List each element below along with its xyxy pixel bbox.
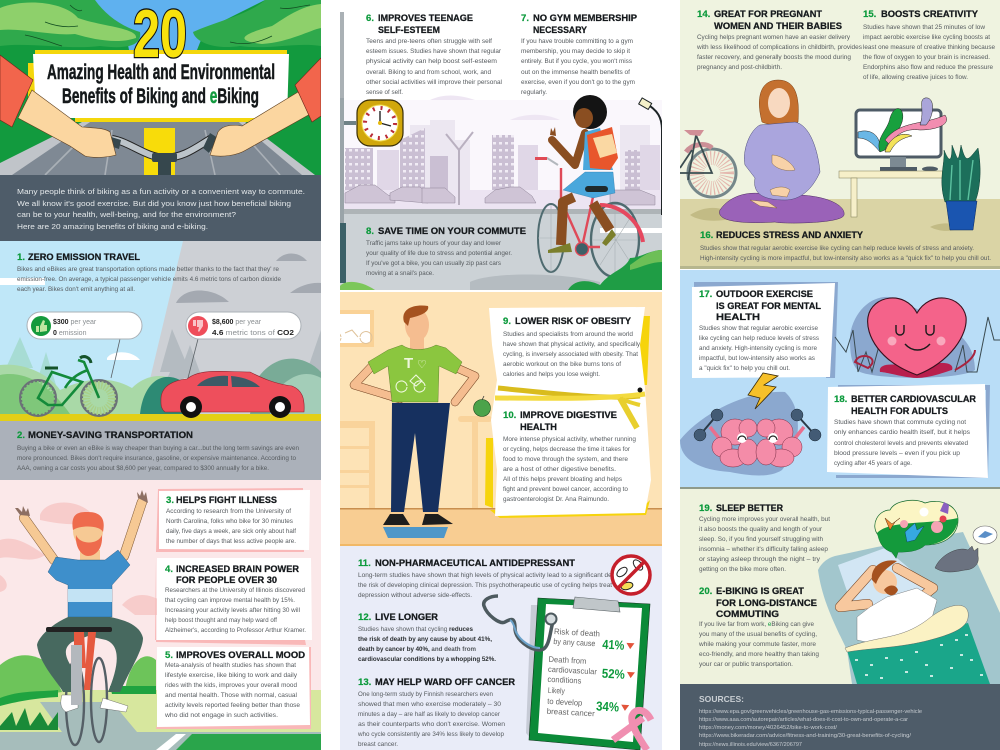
text: self-esteem: esteem issues. Studies have shown that regular — [366, 49, 501, 55]
card: helps fight illness: HELPS FIGHT ILLNESS — [176, 495, 278, 506]
icon: thumbs up — [31, 316, 51, 336]
text: commute: Traffic jams take up hours of your day and lower — [366, 241, 501, 247]
stat: cardiovascular: conditions — [547, 675, 582, 686]
poles — [340, 12, 662, 283]
icon: lightning bolt — [748, 373, 778, 409]
text: commute: moving at a snail's pace. — [366, 271, 434, 277]
icon: parked bicycle — [680, 130, 736, 197]
figure: man with loose trousers — [354, 306, 475, 538]
card: outdoor exercise: HEALTH — [716, 312, 760, 323]
text: creativity: of life, allowing creative juices to flow. — [863, 75, 968, 81]
panel: sleep and e-biking — [680, 489, 1000, 684]
heading 10: IMPROVE DIGESTIVE — [520, 410, 618, 421]
icon: smiling heart — [855, 298, 975, 378]
heading 10: HEALTH — [520, 422, 557, 433]
heading 14: WOMEN AND THEIR BABIES — [714, 21, 843, 32]
bed — [818, 532, 1000, 684]
card: outdoor exercise: and anxiety. High-intensity cycling is more — [699, 346, 818, 352]
icon: red car — [161, 371, 304, 418]
text: cancer: showed that men who exercise moderately – 30 — [358, 702, 502, 708]
text: antidepressant: Long-term studies have shown that high levels of physical activity lead to a significant decrease in — [358, 573, 638, 579]
text: stress: Studies show that regular aerobic exercise like cycling can help reduce levels of stress and anxiety. — [700, 246, 974, 252]
text: stress: High-intensity cycling is more impactful, but low-intensity also works as a "quick fix" to help you chill out. — [700, 256, 991, 262]
callout: car cost: 4.6 metric tons of CO2 — [212, 330, 294, 337]
card: outdoor exercise: IS GREAT FOR MENTAL — [716, 301, 821, 312]
card: improves overall mood: rides with the kids, improves your overall mood — [165, 683, 297, 689]
text: no gym: If you have trouble committing to a gym — [521, 39, 633, 45]
stat: breast cancer — [547, 686, 630, 720]
icon: pink ribbon — [613, 710, 651, 750]
icon: ecg line — [835, 317, 1000, 372]
blanket — [845, 605, 990, 684]
text: live longer: the risk of death by any cause by about 41%, — [358, 637, 492, 643]
text: no gym: membership, you may decide to skip it — [521, 49, 630, 55]
figure: man with loose trousers: T — [404, 355, 413, 372]
heading 7: NECESSARY — [533, 25, 588, 36]
figure: woman on bicycle — [535, 95, 643, 277]
callout: car cost — [186, 312, 301, 378]
text: commute — [366, 241, 512, 277]
heading 13: 13. — [358, 677, 371, 688]
card: outdoor exercise: 17. — [699, 289, 712, 300]
heading 9: LOWER RISK OF OBESITY — [515, 316, 632, 327]
text: digestion: More intense physical activity, whether running — [503, 437, 636, 443]
text: cancer: minutes a day – are half as likely to develop cancer — [358, 712, 500, 718]
text: zero emission: emission-free. On average, a typical passenger vehicle emits 4.6 metric tons of carbon dioxide — [17, 277, 282, 283]
text: sleep: insomnia – whether it's difficulty falling asleep — [699, 547, 829, 553]
text: no gym: entirely. But if you cycle, you won't miss — [521, 59, 632, 65]
callout: bike cost: $300 per year — [53, 319, 97, 326]
text: sleep: it also boosts the quality and length of your — [699, 527, 822, 533]
card: obesity and digestion — [485, 307, 651, 518]
text: stress — [700, 246, 991, 262]
text: creativity: Endorphins also flow and reduce the pressure — [863, 65, 994, 71]
card: increased brain power: Researchers at the University of Illinois discovered — [165, 588, 305, 594]
card: increased brain power — [155, 558, 312, 645]
text: self-esteem: overall. Biking to and from school, work, and — [366, 70, 491, 76]
heading 8: SAVE TIME ON YOUR COMMUTE — [378, 226, 527, 237]
ground — [0, 655, 321, 750]
text: long distance: your car or public transportation. — [699, 662, 793, 668]
clipboard chart — [526, 597, 650, 750]
cars in traffic — [345, 185, 655, 205]
panel: money-saving transportation: Buying a bike or even an eBike is way cheaper than buying a car...but the long term savings are even — [17, 446, 299, 452]
heading 20: FOR LONG-DISTANCE — [716, 598, 818, 609]
text: long distance: you many of the usual benefits of cycling, — [699, 632, 817, 638]
text: pregnant: faster recovery, and generally boosts the mood during — [697, 55, 851, 61]
text: digestion: gastroenterologist Dr. Ana Raimundo. — [503, 497, 609, 503]
text: self-esteem: other social activities will improve their personal — [366, 80, 502, 86]
card: helps fight illness: North Carolina, folks who bike for 30 minutes — [166, 519, 293, 525]
text: creativity: the flow of oxygen to your brain is increased. — [863, 55, 990, 61]
card: better cardiovascular health: blood pressure levels – even if you pick up — [834, 451, 961, 457]
card: improves overall mood: lifestyle exercise, like biking to work and daily — [165, 673, 297, 679]
panel: sources — [680, 684, 1000, 750]
heading 16: 16. — [700, 230, 713, 241]
text: pregnant: with less likelihood of complications in childbirth, provides — [696, 45, 862, 51]
panel: sources: https://www.bikeradar.com/advice/fitness-and-training/30-great-benefits-of-cycling/ — [699, 733, 912, 739]
stat: risk of death: Risk of death — [554, 627, 600, 638]
stat: risk of death — [553, 627, 635, 653]
heading 12: LIVE LONGER — [375, 612, 438, 623]
heading 6: 6. — [366, 13, 374, 24]
figure: cyclist with raised arms — [15, 490, 148, 745]
card: improves overall mood: who did not engage in such activities. — [164, 713, 278, 719]
street lamp — [446, 132, 473, 205]
heading 10 — [503, 410, 618, 433]
stat: breast cancer: breast cancer — [547, 707, 595, 718]
panel: money-saving transportation: more pronounced. Bikes don't require insurance, gasoline, or expensive maintenance. According to — [17, 456, 297, 462]
panel: hero illustration — [0, 0, 321, 175]
card: increased brain power: that cycling can improve mental health by 15%. — [165, 598, 295, 604]
card: helps fight illness: the number of days that less active people are. — [166, 539, 296, 545]
card: improves overall mood: 5. — [165, 650, 173, 661]
text: antidepressant — [358, 573, 638, 599]
sky — [95, 0, 265, 50]
text: no gym: exercise, even if you don't go to the gym — [521, 80, 635, 86]
panel: money-saving transportation: MONEY-SAVING TRANSPORTATION — [28, 430, 193, 441]
text: sleep: Cycling more improves your overall health, but — [699, 517, 830, 523]
text: digestion: or cycling, helps decrease the time it takes for — [503, 447, 630, 453]
text: digestion: fight and prevent bowel cancer, according to — [503, 487, 629, 493]
card: increased brain power: Increasing your activity levels after hitting 30 will — [165, 608, 300, 614]
card: outdoor exercise: like cycling can help reduce levels of stress — [699, 336, 819, 342]
heading 7: 7. — [521, 13, 529, 24]
card: better cardiovascular health: BETTER CARDIOVASCULAR — [851, 394, 976, 405]
panel: city commute scene — [340, 0, 662, 292]
hills — [0, 359, 321, 414]
panel: introduction: can be to your health, well-being, and for the environment? — [17, 210, 236, 219]
stat: cardiovascular — [547, 655, 636, 688]
card: better cardiovascular health: control cholesterol levels and prevents elevated — [834, 441, 968, 447]
card: better cardiovascular health: only enhances cardio health itself, but it helps — [834, 430, 970, 436]
furniture — [340, 416, 492, 508]
icon: stethoscope — [484, 596, 556, 650]
text: long distance: while making your commute faster, more — [698, 642, 817, 648]
text: creativity: impact aerobic exercise like cycling boosts at — [863, 35, 990, 41]
card: better cardiovascular health: Studies have shown that commute cycling not — [834, 420, 966, 426]
panel: money-saving transportation: 2. — [17, 430, 25, 441]
heading 11: NON-PHARMACEUTICAL ANTIDEPRESSANT — [375, 558, 575, 569]
text: commute: your quality of life due to stress and potential anger. — [366, 251, 512, 257]
card: outdoor exercise: impactful, but low-intensity also works as — [699, 356, 815, 362]
panel: introduction — [0, 175, 321, 241]
panel: mental and heart health — [680, 270, 1000, 489]
panel: money-saving transportation — [0, 421, 321, 480]
text: self-esteem: sense of self. — [366, 90, 403, 96]
monitor — [856, 98, 947, 172]
stat: cardiovascular: cardiovascular — [548, 665, 597, 676]
card: increased brain power: Alzheimer's, according to Professor Arthur Kramer. — [165, 628, 306, 634]
city skyline — [345, 120, 660, 190]
panel: introduction: Many people think of biking as a fun activity or a convenient way to commute. — [17, 187, 305, 196]
text: obesity: cycling, is inversely associated with obesity. That — [503, 352, 638, 358]
text: sleep: getting on the bike more often. — [699, 567, 786, 573]
text: zero emission — [17, 267, 282, 293]
text: self-esteem: physical activity can help boost self-esteem — [366, 59, 497, 65]
card: improves overall mood: and mental health. Those with normal, casual — [165, 693, 297, 699]
icon: sleeping cat — [935, 546, 978, 572]
card: increased brain power: INCREASED BRAIN POWER — [176, 564, 299, 575]
figure: sleeping man — [840, 560, 937, 645]
icon: measuring tape — [495, 388, 645, 428]
panel: health column one — [0, 480, 321, 750]
text: digestion: food to move through the system, and there — [503, 457, 629, 463]
card: outdoor exercise: OUTDOOR EXERCISE — [716, 289, 814, 300]
text: creativity — [863, 25, 996, 81]
icon: apple — [474, 396, 490, 416]
panel: sources: https://news.illinois.edu/view/6367/206797 — [699, 742, 802, 748]
heading 20: COMMUTING — [716, 609, 779, 620]
text: self-esteem — [366, 39, 502, 96]
icon: clock — [357, 100, 403, 146]
figure: man with loose trousers: ♡ — [417, 359, 427, 371]
card: helps fight illness: daily, five days a week, are sick only about half — [166, 529, 296, 535]
stat: risk of death: 41% — [602, 637, 625, 653]
text: sleep: sleep. So, if you find yourself struggling with — [699, 537, 823, 543]
text: long distance: eco-friendly, and more healthy than taking — [699, 652, 819, 658]
text: live longer — [358, 627, 496, 663]
text: no gym: out on the immense health benefits of — [521, 70, 630, 76]
callout: car cost: $8,600 per year — [212, 319, 262, 326]
card: outdoor exercise: a "quick fix" to help you chill out. — [699, 366, 790, 372]
heading 7: NO GYM MEMBERSHIP — [533, 13, 638, 24]
text: cancer: breast cancer. — [358, 742, 398, 748]
heading 15: 15. — [863, 9, 876, 20]
heading 19: 19. — [699, 503, 712, 514]
card: outdoor exercise: Studies show that regular aerobic exercise — [699, 326, 819, 332]
heading 1: ZERO EMISSION TRAVEL — [28, 252, 140, 263]
title: line 1: Amazing Health and Environmental — [47, 61, 275, 84]
icon: left arm — [0, 55, 116, 157]
text: creativity: Studies have shown that 25 minutes of low — [863, 25, 986, 31]
card: improves overall mood — [156, 647, 311, 729]
icon: thumbs down — [188, 316, 208, 336]
heading 15: BOOSTS CREATIVITY — [881, 9, 979, 20]
text: antidepressant: depression without adverse side-effects. — [358, 593, 472, 599]
callout: bike cost — [27, 312, 142, 378]
text: self-esteem: Teens and pre-teens often struggle with self — [366, 39, 492, 45]
text: commute: If you've got a bike, you can usually zip past cars — [366, 261, 501, 267]
text: sleep: or staying asleep through the night – try — [699, 557, 820, 563]
text: no gym: regularly. — [521, 90, 547, 96]
panel: sources: https://www.aaa.com/autorepair/articles/what-does-it-cost-to-own-and-operate-a-car — [699, 717, 908, 723]
heading 6: SELF-ESTEEM — [378, 25, 440, 36]
heading 14: 14. — [697, 9, 710, 20]
ground and road — [340, 190, 662, 290]
road — [0, 118, 315, 175]
bushes — [340, 250, 662, 290]
panel: weight and digestion scene — [331, 292, 662, 546]
stat: cardiovascular: Death from — [548, 655, 587, 666]
icon: no pills sign — [612, 556, 650, 594]
stat: breast cancer: to develop — [547, 697, 583, 708]
icon: dream bubble — [875, 500, 958, 558]
stat: breast cancer: 34% — [596, 698, 620, 715]
text: obesity — [503, 332, 640, 378]
card: helps fight illness: According to research from the University of — [166, 509, 291, 515]
text: live longer: death by cancer by 40%, and death from — [358, 647, 476, 653]
icon: cat dream bubble — [973, 526, 997, 544]
text: long distance — [698, 622, 819, 668]
title banner — [28, 0, 289, 122]
heading 20: 20. — [699, 586, 712, 597]
icon: handlebar — [107, 133, 218, 175]
text: cancer — [357, 692, 505, 748]
stat: cardiovascular: 52% — [601, 666, 626, 682]
heading 14: GREAT FOR PREGNANT — [714, 9, 822, 20]
text: cancer: One long-term study by Finnish researchers even — [358, 692, 493, 698]
text: live longer: Studies have shown that cycling reduces — [358, 627, 474, 633]
heading 9: 9. — [503, 316, 511, 327]
text: sleep — [699, 517, 830, 573]
icon: brain with dumbbells — [694, 409, 821, 467]
icon: colour swirls — [858, 98, 947, 152]
text: pregnant: pregnancy and post-childbirth. — [697, 65, 782, 71]
card: increased brain power: help boost thought and may help ward off — [165, 618, 277, 624]
heading 19: SLEEP BETTER — [716, 503, 783, 514]
text: obesity: Studies and specialists from around the world — [503, 332, 633, 338]
icon: right arm — [210, 58, 321, 156]
trees — [8, 330, 321, 385]
panel: zero emission travel — [0, 241, 321, 421]
heading 7 — [521, 13, 638, 36]
text: creativity: least one measure of creative thinking because — [863, 45, 996, 51]
text: no gym — [521, 39, 635, 96]
card: better cardiovascular health: HEALTH FOR ADULTS — [851, 406, 949, 417]
icon: potted plant — [942, 145, 980, 230]
picture frame — [331, 310, 374, 347]
text: zero emission: each year. Bikes don't emit anything at all. — [17, 287, 135, 293]
heading 1: 1. — [17, 252, 25, 263]
shapes behind illustrations — [680, 282, 990, 478]
panel: mental health and longevity — [340, 546, 662, 750]
text: live longer: cardiovascular conditions by a whopping 52%. — [358, 657, 496, 663]
heading 1 — [18, 253, 140, 260]
card: better cardiovascular health: cycling after 45 years of age. — [834, 461, 912, 467]
card: better cardiovascular health: 18. — [834, 394, 847, 405]
panel: money-saving transportation: AAA, owning a car costs you about $8,600 per year, compared to $300 annually for a bike. — [17, 466, 269, 472]
panel: sources: https://www.epa.gov/greenvehicles/greenhouse-gas-emissions-typical-passenger-vehicle — [699, 709, 922, 715]
text: cancer: as their counterparts who don't exercise. Women — [358, 722, 505, 728]
text: obesity: have shown that physical activity, and specifically — [503, 342, 640, 348]
card: improves overall mood: activity levels reported feeling better than those — [165, 703, 301, 709]
stat: breast cancer: Likely — [548, 686, 565, 696]
icon: green bike — [20, 357, 116, 416]
road — [0, 414, 321, 421]
text: zero emission: Bikes and eBikes are great transportation options made better thanks to the fact that they' re — [17, 267, 280, 273]
card: helps fight illness — [156, 488, 310, 552]
heading 12: 12. — [358, 612, 371, 623]
card: increased brain power: 4. — [165, 564, 173, 575]
text: digestion: All of this helps prevent bloating and helps — [503, 477, 622, 483]
heading 11: 11. — [358, 558, 371, 569]
stat: risk of death: by any cause — [553, 637, 596, 648]
text: cancer: who cycle consistently are 34% less likely to develop — [357, 732, 505, 738]
panel: sources: https://money.com/money/4026452/bike-to-work-cost/ — [699, 725, 838, 731]
heading 20: E-BIKING IS GREAT — [716, 586, 804, 597]
text: digestion — [503, 437, 636, 503]
panel: pregnancy and creativity scene — [680, 0, 1000, 269]
hills and foliage — [0, 0, 321, 47]
figure: pregnant woman meditating — [719, 80, 844, 223]
heading 20 — [699, 586, 818, 620]
table — [839, 171, 945, 217]
panel: sources: SOURCES: — [699, 694, 744, 704]
card: helps fight illness: 3. — [166, 495, 174, 506]
title: line 2: Benefits of Biking and eBiking — [62, 85, 259, 108]
heading 6 — [366, 14, 473, 34]
heading 13: MAY HELP WARD OFF CANCER — [375, 677, 515, 688]
heading 10: 10. — [503, 410, 516, 421]
text: long distance: If you live far from work, eBiking can give — [699, 622, 815, 628]
heading 14 — [697, 9, 843, 32]
card: increased brain power: FOR PEOPLE OVER 30 — [176, 575, 277, 586]
card: better cardiovascular health — [827, 384, 988, 478]
heading 16: REDUCES STRESS AND ANXIETY — [716, 230, 864, 241]
callout: bike cost: 0 emission — [53, 330, 87, 337]
panel: introduction: We all know it's good exercise. But did you know just how beneficial biking — [17, 199, 291, 208]
text: obesity: calories and helps you lose weight. — [503, 372, 600, 378]
card: improves overall mood: IMPROVES OVERALL MOOD — [176, 650, 305, 661]
heading 6: IMPROVES TEENAGE — [378, 13, 474, 24]
card: improves overall mood: Meta-analysis of health studies has shown that — [165, 663, 296, 669]
heading 8: 8. — [366, 226, 374, 237]
text: antidepressant: the risk of developing clinical depression. This psychotherapeutic use of cycling helps treat — [358, 583, 612, 589]
card: outdoor exercise — [692, 283, 835, 378]
text: pregnant — [696, 35, 862, 71]
text: digestion: are a host of other digestive benefits. — [503, 467, 616, 473]
text: obesity: aerobic workout on the bike burns tons of — [503, 362, 621, 368]
panel: introduction: Here are 20 amazing benefits of biking and e-biking. — [17, 222, 208, 231]
text: pregnant: Cycling helps pregnant women have an easier delivery — [697, 35, 850, 41]
